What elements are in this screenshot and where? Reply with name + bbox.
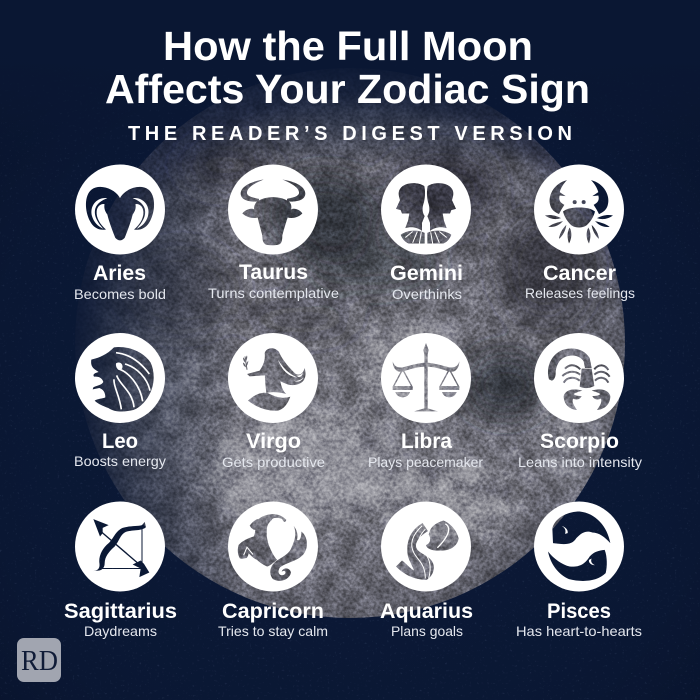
icon: ram head — [75, 164, 165, 254]
sign: Pisces — [516, 502, 642, 639]
title — [105, 23, 590, 112]
name: Capricorn: Capricorn — [222, 600, 324, 623]
icon: two fish — [534, 502, 624, 592]
sign: Aquarius — [380, 502, 473, 639]
sign: Leo — [74, 333, 166, 469]
icon: sea goat — [228, 502, 318, 592]
sign: Scorpio — [518, 333, 642, 470]
sign: Taurus — [208, 164, 339, 301]
trait: Leo: Boosts energy — [74, 453, 166, 469]
icon: scorpion — [534, 333, 624, 423]
sign: Cancer — [525, 164, 635, 301]
trait: Libra: Plays peacemaker — [368, 454, 483, 470]
sign: Virgo — [222, 333, 325, 470]
subtitle: THE READER’S DIGEST VERSION — [128, 123, 572, 145]
sign: Sagittarius — [64, 502, 177, 639]
icon: twins — [381, 164, 471, 254]
trait: Cancer: Releases feelings — [525, 285, 635, 301]
logo: RD — [17, 638, 61, 682]
icon: crab — [534, 164, 624, 254]
trait: Virgo: Gets productive — [222, 454, 325, 470]
sign: Gemini — [381, 164, 471, 302]
icon: bow and arrow — [75, 502, 165, 592]
icon: maiden — [228, 333, 318, 423]
icon: bull head — [228, 164, 318, 254]
icon: scales — [381, 333, 471, 423]
name: Pisces: Pisces — [547, 600, 611, 623]
name: Leo: Leo — [102, 430, 138, 453]
icon: water bearer urn — [381, 502, 471, 592]
name: Cancer: Cancer — [543, 262, 616, 285]
name: Sagittarius: Sagittarius — [64, 600, 177, 623]
full moon — [75, 68, 625, 618]
trait: Capricorn: Tries to stay calm — [218, 623, 328, 639]
name: Libra: Libra — [401, 430, 452, 453]
fade of the sky over the top of the moon — [0, 0, 700, 165]
title: How the Full Moon — [163, 23, 533, 69]
trait: Aries: Becomes bold — [74, 286, 166, 302]
name: Gemini: Gemini — [390, 262, 463, 285]
title: Affects Your Zodiac Sign — [105, 66, 590, 112]
trait: Pisces: Has heart-to-hearts — [516, 623, 642, 639]
icon: lion head — [75, 333, 165, 423]
name: Taurus: Taurus — [239, 261, 308, 284]
name: Virgo: Virgo — [246, 430, 301, 453]
sign: Capricorn — [218, 502, 328, 639]
name: Aries: Aries — [93, 262, 146, 285]
sign: Aries — [74, 164, 166, 302]
logo: RD: RD — [21, 645, 58, 677]
name: Aquarius: Aquarius — [380, 600, 473, 623]
trait: Gemini: Overthinks — [392, 286, 462, 302]
trait: Taurus: Turns contemplative — [208, 285, 339, 301]
sign: Libra — [368, 333, 483, 470]
trait: Scorpio: Leans into intensity — [518, 454, 642, 470]
name: Scorpio: Scorpio — [540, 430, 619, 453]
trait: Sagittarius: Daydreams — [84, 623, 157, 639]
trait: Aquarius: Plans goals — [391, 623, 463, 639]
